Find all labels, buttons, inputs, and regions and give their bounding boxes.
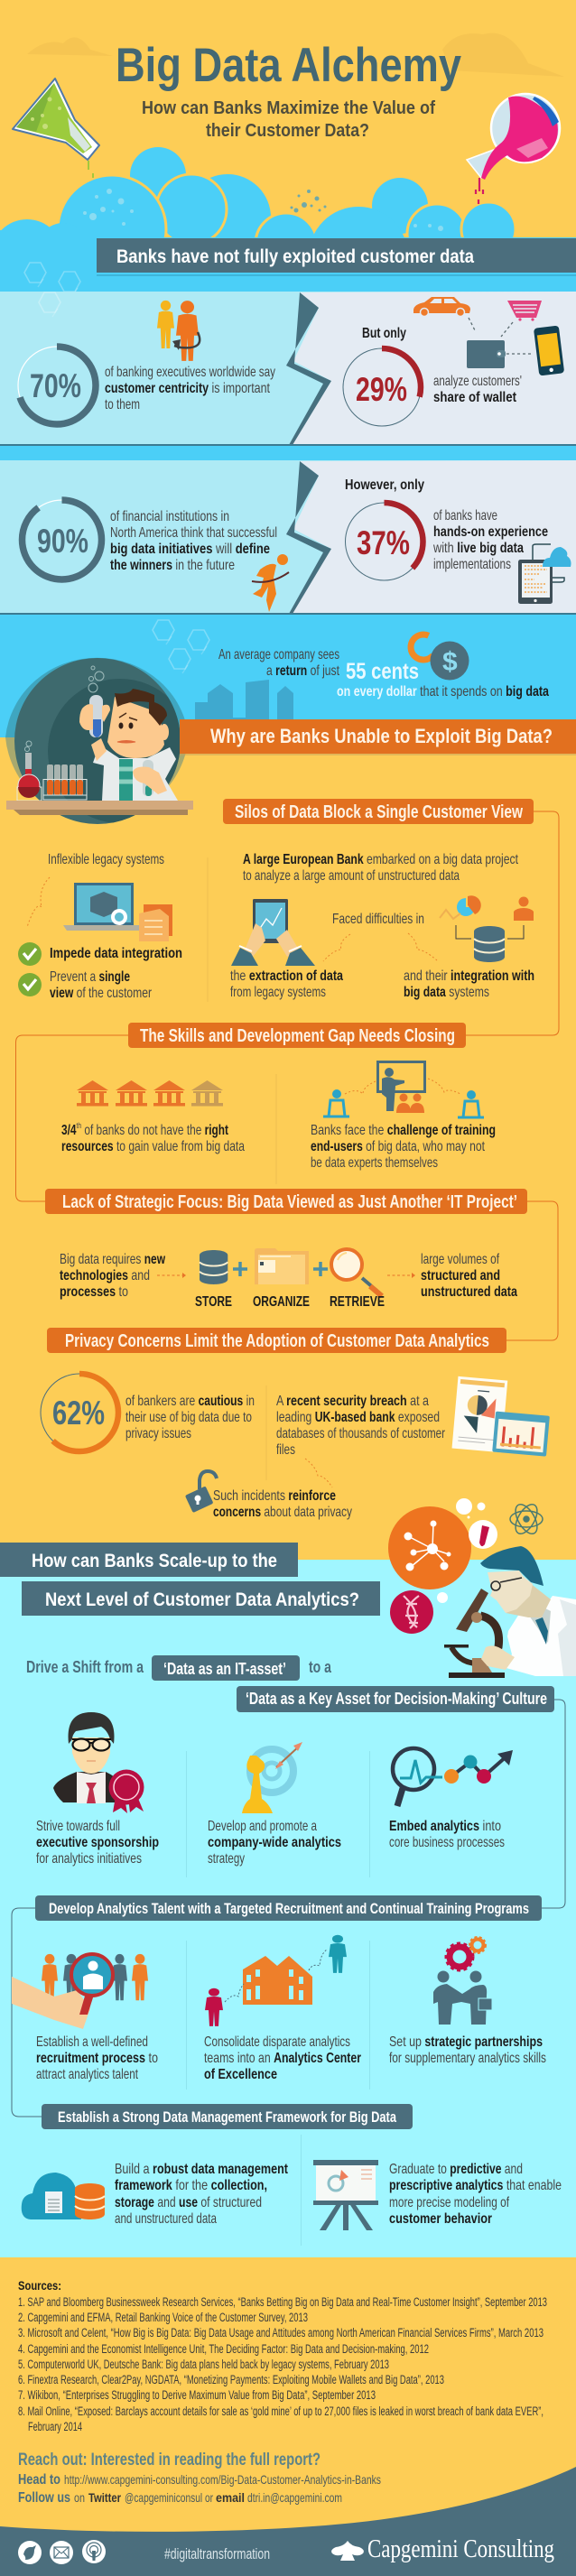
icon: chess piece and target: [242, 1742, 302, 1813]
text: define the winners: [110, 509, 277, 573]
text: predictive: more precise modeling of: [389, 2195, 509, 2210]
text: large volumes: [421, 1252, 517, 1300]
reach out: on: [74, 2490, 85, 2505]
icon: dna: [390, 1590, 433, 1634]
subtitle: their Customer Data?: [206, 121, 369, 141]
panel: stats row one: [0, 292, 576, 446]
text: define the winners: of financial institutions in: [110, 509, 229, 524]
text: embed: Embed analytics into: [389, 1819, 501, 1834]
sources: 7. Wikibon, “Enterprises Struggling to Derive Maximum Value from Big Data”, September 2013: [18, 2388, 376, 2402]
text: set up: [389, 2034, 546, 2066]
section: skills left: [61, 1080, 245, 1154]
text: organize: ORGANIZE: [253, 1294, 310, 1310]
icon: green flask: [13, 79, 99, 178]
section: silos right column: [230, 852, 534, 1000]
icon: database: [200, 1250, 228, 1284]
pill: data as it-asset: ‘Data as an IT-asset’: [163, 1660, 286, 1678]
text: prevent: [50, 969, 153, 1001]
subtitle: [142, 98, 435, 141]
icon: presentation: [323, 1061, 484, 1117]
text: define the winners: the winners in the future: [110, 558, 235, 573]
text: however only: However, only: [345, 477, 424, 493]
sources: Sources:: [18, 2278, 61, 2293]
footer background: [0, 2467, 576, 2576]
dotted arrows: [323, 933, 437, 961]
callout: 55 cents: on every dollar that it spends on big data: [337, 684, 549, 700]
reach out: @capgeminiconsul or: [125, 2490, 213, 2505]
panel: stats row two: [0, 460, 576, 616]
text: cautious: privacy issues: [125, 1426, 191, 1441]
text: hands-on experience: of banks have: [433, 508, 497, 524]
text: reinforce concerns: [213, 1488, 352, 1520]
ring: 37%: 37%: [357, 524, 410, 561]
title: Big Data Alchemy: [116, 39, 461, 92]
text: three quarters: of banks do not have the: [81, 1123, 205, 1138]
text: establish: [36, 2034, 158, 2082]
sources: [18, 2278, 547, 2433]
text: security breach: A recent security breach at a: [276, 1394, 429, 1409]
text: retrieve: RETRIEVE: [330, 1294, 385, 1310]
pill: skills gap: The Skills and Development Gap Needs Closing: [140, 1026, 455, 1046]
illustration: scientist with microscope: [444, 1546, 576, 1678]
text: reinforce concerns: Such incidents reinforce: [213, 1488, 336, 1504]
hexagons: [153, 620, 209, 673]
icon: folder: [255, 1248, 309, 1284]
social icons: [18, 2540, 106, 2564]
scientist body and face: [91, 689, 178, 801]
icon: cloud and database: [22, 2173, 105, 2219]
text: new technologies: [60, 1252, 165, 1300]
text: integration: big data systems: [404, 985, 489, 1000]
text: predictive: customer behavior: [389, 2211, 492, 2227]
sources: 2. Capgemini and EFMA, Retail Banking Voice of the Customer Survey, 2013: [18, 2311, 308, 2324]
illustration: worried scientist: [5, 658, 193, 824]
hashtag: #digitaltransformation: [164, 2545, 270, 2562]
text: consolidate: of Excellence: [204, 2067, 277, 2082]
text: share of wallet: share of wallet: [433, 390, 517, 405]
test tube in hand: [79, 695, 110, 737]
text: customer centricity: of banking executives worldwide say: [105, 365, 275, 380]
icon: atom: [510, 1501, 543, 1537]
ring: 37%: [345, 503, 423, 580]
ring: 70%: [18, 347, 96, 424]
text: challenge of training: Banks face the challenge of training: [311, 1123, 496, 1138]
icon: building and people: [205, 1935, 347, 2026]
text: hands-on experience: [432, 508, 548, 572]
text: integration: [404, 968, 534, 1000]
text: cautious: [125, 1394, 255, 1441]
icon: recruiting magnifier: [12, 1954, 148, 2029]
text: extraction: the extraction of data: [230, 968, 343, 984]
bubbles: [25, 666, 104, 751]
text: establish: recruitment process to: [36, 2051, 158, 2066]
reach out: Head to: [18, 2472, 60, 2488]
text: security breach: leading UK-based bank exposed: [276, 1410, 440, 1425]
icon: report and chart: [452, 1376, 550, 1457]
ring: 29%: [343, 348, 421, 426]
callout: 55 cents: An average company sees: [218, 647, 339, 663]
icon: gears and handshake: [433, 1937, 492, 2025]
skyline: [195, 680, 293, 719]
text: establish: Establish a well-defined: [36, 2034, 148, 2050]
text: consolidate: teams into an Analytics Center: [204, 2051, 361, 2066]
text: extraction: from legacy systems: [230, 985, 326, 1000]
text: prevent: Prevent a single: [50, 969, 130, 985]
icon: car: [413, 297, 470, 316]
text: security breach: files: [276, 1442, 295, 1458]
banner: banks have not fully exploited: [97, 238, 576, 276]
background: cyan section: [0, 1560, 576, 2257]
dotted arrow: [305, 1459, 332, 1487]
reach out: dtri.in@capgemini.com: [247, 2490, 342, 2505]
icon: email: [50, 2541, 73, 2564]
section: data management: [22, 2160, 562, 2230]
banner: banks have not fully exploited: Banks have not fully exploited customer data: [116, 246, 474, 267]
plus: [233, 1262, 247, 1276]
text: consolidate: [204, 2034, 361, 2082]
text: embed: core business processes: [389, 1835, 505, 1850]
banner: how can banks scale-up: [0, 1543, 298, 1577]
text: challenge of training: [311, 1123, 496, 1171]
icon: open lock: [185, 1471, 217, 1513]
text: european bank: A large European Bank embarked on a big data project: [243, 852, 518, 867]
ring: 90%: [22, 500, 101, 579]
text: embed: [389, 1819, 505, 1850]
icon: podcast: [82, 2540, 106, 2563]
icon: executive with rosette: [53, 1712, 144, 1813]
reach out: Reach out: Interested in reading the full report?: [18, 2451, 321, 2469]
section: skills right: [311, 1061, 496, 1171]
ring: 70%: 70%: [30, 367, 81, 404]
text: cautious: of bankers are cautious in: [125, 1394, 255, 1409]
icon: dotted arrow: [27, 877, 50, 927]
section: privacy: [41, 1374, 550, 1520]
text: but only: But only: [362, 326, 406, 341]
ring: 62%: 62%: [52, 1395, 105, 1432]
icon: runner: [252, 554, 289, 612]
icon: two people: [157, 301, 200, 361]
text: drive a shift: Drive a Shift from a: [26, 1658, 144, 1676]
background: blue section: [0, 615, 576, 737]
icon: phone: [534, 325, 564, 376]
icon: analytics magnifier and trend: [393, 1748, 513, 1806]
pill: silos of data: [223, 799, 534, 824]
blue band between panels: [0, 446, 576, 460]
text: develop: Develop and promote a: [208, 1819, 317, 1834]
pill: data management: Establish a Strong Data Management Framework for Big Data: [58, 2108, 396, 2126]
ring: 62%: [41, 1374, 118, 1451]
pill: skills gap: [128, 1023, 466, 1048]
icon: easel: [313, 2160, 378, 2230]
text: three quarters: 3/4: [61, 1123, 77, 1138]
text: new technologies: processes to: [60, 1284, 128, 1300]
banner: next level: Next Level of Customer Data Analytics?: [45, 1589, 359, 1610]
text: robust framework: storage and use of structured: [115, 2195, 262, 2210]
icon: shopping cart: [507, 301, 542, 321]
icon: bank buildings: [77, 1080, 223, 1107]
faint background clouds: [27, 33, 564, 77]
text: customer centricity: [105, 365, 275, 412]
callout: 55 cents: [218, 647, 549, 700]
text: new technologies: technologies and: [60, 1268, 150, 1283]
reach out: Twitter: [88, 2490, 121, 2505]
text: define the winners: North America think that successful: [110, 525, 277, 541]
text: strive: [36, 1819, 159, 1867]
banner: next level: [22, 1581, 380, 1616]
section: silos left column: [18, 852, 182, 1001]
text: establish: attract analytics talent: [36, 2067, 138, 2082]
text: hands-on experience: with live big data: [432, 541, 524, 556]
banner: why are banks unable: [180, 719, 576, 755]
callout: 55 cents: 55 cents: [346, 659, 419, 684]
reach out: http://www.capgemini-consulting.com/Big-Data-Customer-Analytics-in-Banks: [64, 2472, 381, 2487]
pill: key asset culture: [237, 1686, 554, 1712]
connector lines: [16, 811, 559, 1340]
text: predictive: Graduate to predictive and: [389, 2162, 523, 2177]
text: large volumes: unstructured data: [421, 1284, 517, 1300]
text: new technologies: Big data requires new: [60, 1252, 165, 1267]
pill: develop analytics talent: [35, 1895, 542, 1921]
illustration: science icons: [388, 1498, 543, 1634]
text: set up: Set up strategic partnerships: [389, 2034, 543, 2050]
text: strive: for analytics initiatives: [36, 1851, 142, 1867]
pill: data management: [42, 2104, 413, 2129]
bubbles: [437, 1498, 486, 1603]
icon: documents: [139, 904, 172, 941]
hand: [481, 1645, 515, 1670]
text: robust framework: Build a robust data management: [115, 2162, 289, 2177]
clouds: [0, 147, 576, 306]
text: strive: executive sponsorship: [36, 1835, 159, 1850]
section: talent columns: [12, 1935, 546, 2082]
text: develop: company-wide analytics: [208, 1835, 341, 1850]
text: consolidate: Consolidate disparate analytics: [204, 2034, 350, 2050]
text: impede: Impede data integration: [50, 946, 182, 961]
text: reinforce concerns: concerns about data privacy: [213, 1505, 352, 1520]
text: to a: to a: [309, 1658, 332, 1676]
icon: wallet: [467, 318, 533, 368]
callout: 55 cents: a return of just: [266, 663, 339, 679]
text: security breach: databases of thousands of customer: [276, 1426, 445, 1441]
icon: tablet in hands: [231, 899, 315, 966]
text: customer centricity: customer centricity is important: [105, 381, 270, 396]
text: european bank: [243, 852, 518, 884]
text: challenge of training: be data experts themselves: [311, 1155, 438, 1171]
text: customer centricity: to them: [105, 397, 140, 412]
text: predictive: [389, 2162, 562, 2227]
text: store: STORE: [195, 1294, 232, 1310]
icon: magnifier: [331, 1249, 382, 1296]
text: challenge of training: end-users of big data, who may not: [311, 1139, 485, 1154]
ring: 29%: 29%: [356, 371, 407, 408]
text: robust framework: [115, 2162, 289, 2227]
text: extraction: [230, 968, 343, 1000]
text: three quarters: [61, 1121, 245, 1154]
icon: coins: [405, 629, 469, 681]
text: european bank: to analyze a large amount of unstructured data: [243, 868, 460, 884]
reach out: email: [216, 2490, 245, 2505]
text: share of wallet: [433, 374, 522, 405]
text: inflexible legacy systems: Inflexible legacy systems: [48, 852, 164, 867]
arrow: [387, 1273, 415, 1278]
text: strive: Strive towards full: [36, 1819, 120, 1834]
text: develop: strategy: [208, 1851, 245, 1867]
text: three quarters: resources to gain value from big data: [61, 1139, 245, 1154]
plus: [313, 1262, 328, 1276]
reach out: Follow us: [18, 2490, 70, 2506]
reach out: [18, 2451, 381, 2506]
banner: how can banks scale-up: How can Banks Scale-up to the: [32, 1551, 277, 1571]
test tubes rack: [43, 764, 87, 800]
text: large volumes: structured and: [421, 1268, 500, 1283]
icon: pink flask: [467, 94, 560, 204]
hexagon decoration: [24, 263, 80, 296]
text: three quarters: right: [205, 1123, 228, 1138]
red flask: [17, 753, 42, 801]
text: develop: [208, 1819, 341, 1867]
text: faced difficulties: Faced difficulties in: [332, 912, 424, 927]
text: three quarters: th: [77, 1121, 81, 1130]
text: prevent: view of the customer: [50, 986, 153, 1001]
text: robust framework: framework for the collection,: [115, 2178, 267, 2193]
section: culture columns: [36, 1712, 513, 1867]
table: [6, 801, 193, 815]
text: define the winners: big data initiatives will define: [110, 542, 270, 557]
icon: coins: $: [442, 647, 458, 677]
text: integration: and their integration with: [404, 968, 534, 984]
section: store organize retrieve: [60, 1248, 517, 1310]
icon: test tube: [469, 1520, 497, 1549]
pill: data as it-asset: [152, 1655, 300, 1681]
connector lines: [12, 1700, 565, 2117]
sources: February 2014: [28, 2420, 82, 2433]
icon: laptop: [63, 883, 140, 931]
text: share of wallet: analyze customers': [433, 374, 522, 389]
sources: 5. Computerworld UK, Deutsche Bank: Big data plans held back by legacy systems, February 2013: [18, 2358, 389, 2371]
microscope: [444, 1589, 505, 1678]
icon: check one: [18, 942, 42, 966]
icon: check two: [18, 973, 42, 996]
subtitle: How can Banks Maximize the Value of: [142, 98, 435, 118]
icon: tablet and cloud: [518, 544, 571, 604]
text: robust framework: and unstructured data: [115, 2211, 217, 2227]
ring: 90%: 90%: [37, 523, 88, 560]
arrow: [157, 1273, 186, 1278]
pill: privacy concerns: [47, 1328, 506, 1353]
text: cautious: their use of big data due to: [125, 1410, 252, 1425]
text: security breach: [276, 1394, 445, 1458]
text: hands-on experience: implementations: [433, 557, 511, 572]
icon: twitter: [18, 2541, 42, 2564]
icon: database integration: [440, 895, 534, 962]
text: large volumes: large volumes of: [421, 1252, 499, 1267]
icon: molecule: [388, 1506, 471, 1589]
text: hands-on experience: hands-on experience: [433, 524, 548, 540]
text: predictive: prescriptive analytics that enable: [389, 2178, 562, 2193]
